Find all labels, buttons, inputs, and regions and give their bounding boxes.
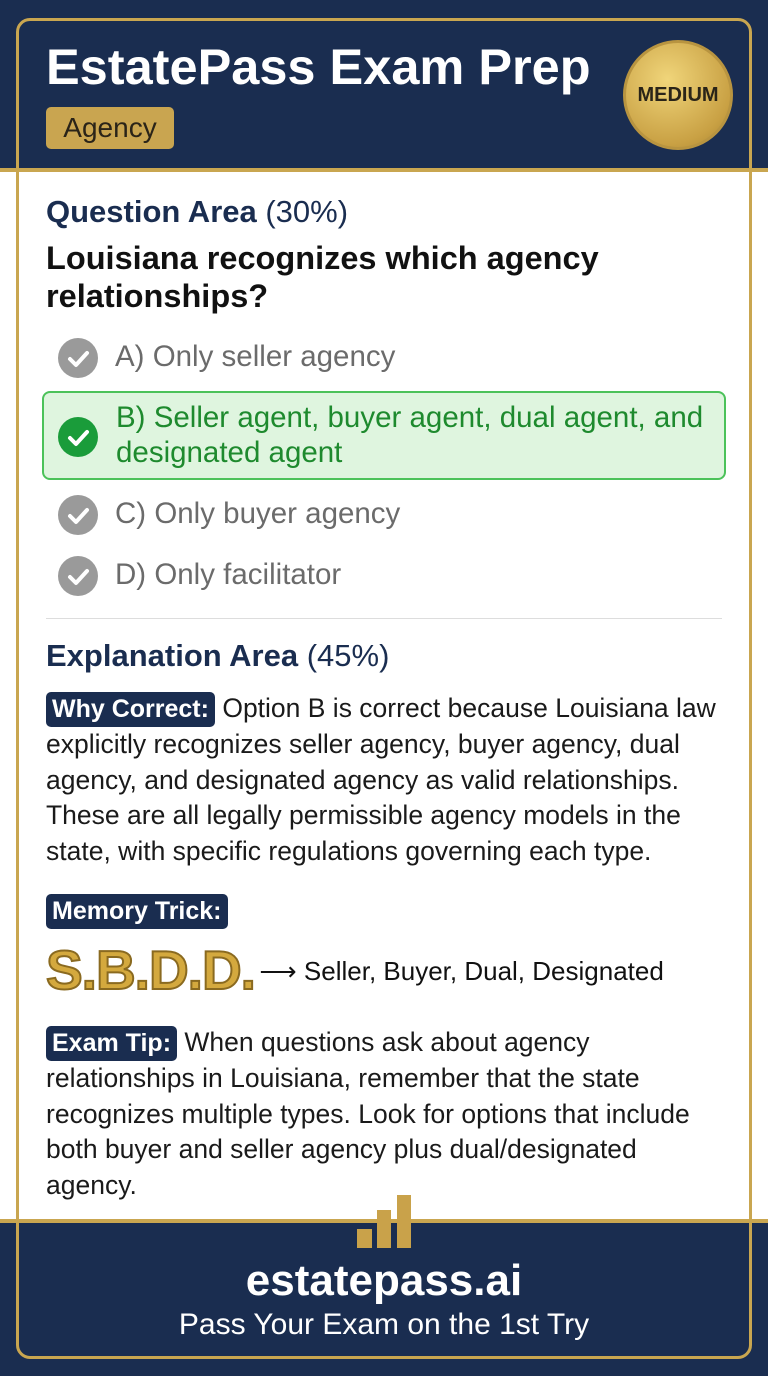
why correct: agency, and designated agency as valid relationships. <box>46 764 679 794</box>
exam tip: relationships in Louisiana, remember that the state <box>46 1063 640 1093</box>
why correct: explicitly recognizes seller agency, buyer agency, dual <box>46 729 680 759</box>
exam tip: recognizes multiple types. Look for options that include <box>46 1098 690 1128</box>
exam tip: When questions ask about agency <box>184 1027 590 1057</box>
option C <box>58 495 400 535</box>
why correct: state, with specific regulations governing each type. <box>46 836 651 866</box>
exam tip: agency. <box>46 1170 137 1200</box>
why correct: These are all legally permissible agency models in the <box>46 800 681 830</box>
question text <box>46 240 599 314</box>
exam tip: Exam Tip: <box>52 1029 171 1057</box>
question text: relationships? <box>46 278 268 314</box>
badge: medium <box>623 40 733 150</box>
option A <box>58 338 396 378</box>
badge: Agency: Agency <box>63 112 157 143</box>
option B correct: B) Seller agent, buyer agent, dual agent, and <box>116 401 703 434</box>
question text: Louisiana recognizes which agency <box>46 240 599 276</box>
option D: D) Only facilitator <box>115 558 341 591</box>
badge: Agency <box>46 107 174 149</box>
option C: C) Only buyer agency <box>115 497 400 530</box>
badge: medium: MEDIUM <box>637 84 719 106</box>
option A: A) Only seller agency <box>115 340 395 373</box>
icon: bar chart <box>357 1195 411 1248</box>
memory trick label: Memory Trick: <box>52 897 222 925</box>
explanation heading: Explanation Area (45%) <box>46 638 389 673</box>
option B correct <box>42 391 726 480</box>
why correct: Option B is correct because Louisiana law <box>222 693 716 723</box>
mnemonic: S.B.D.D. ⟶ Seller, Buyer, Dual, Designated <box>46 939 664 1001</box>
question area heading: Question Area (30%) <box>46 194 348 229</box>
exam tip <box>46 1026 690 1200</box>
title: EstatePass Exam Prep <box>46 38 591 95</box>
footer brand: estatepass.ai <box>246 1256 522 1305</box>
why correct: Why Correct: <box>52 695 209 723</box>
exam tip: both buyer and seller agency plus dual/designated <box>46 1134 637 1164</box>
footer tagline: Pass Your Exam on the 1st Try <box>179 1308 589 1341</box>
why correct <box>46 692 716 866</box>
option B correct: designated agent <box>116 436 342 469</box>
option D <box>58 556 341 596</box>
content panel <box>0 168 768 1223</box>
